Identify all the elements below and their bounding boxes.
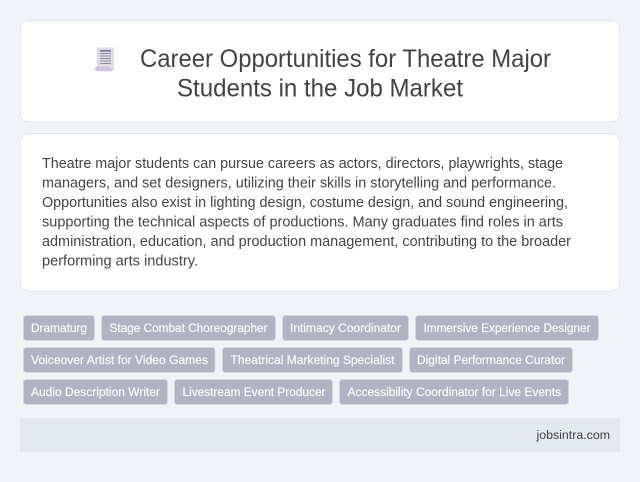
tag: Stage Combat Choreographer: Stage Combat Choreographer: [110, 321, 268, 335]
tag list: [24, 316, 598, 404]
text block: description: administration, education, and production management, contributing to the broader: [42, 234, 571, 250]
footer: [20, 418, 620, 452]
text block: description: supporting the technical aspects of productions. Many graduates find roles in arts: [42, 214, 563, 230]
tag: Digital Performance Curator: [410, 348, 572, 372]
tag: Theatrical Marketing Specialist: [222, 348, 402, 372]
tag: Intimacy Coordinator: Intimacy Coordinator: [290, 321, 401, 335]
tag: Voiceover Artist for Video Games: [24, 348, 215, 372]
icon: script document: [95, 48, 114, 71]
tag: Voiceover Artist for Video Games: Voiceover Artist for Video Games: [31, 353, 208, 367]
tag: Theatrical Marketing Specialist: Theatrical Marketing Specialist: [230, 353, 395, 367]
text block: description: managers, and set designers, utilizing their skills in storytelling and performance.: [42, 176, 556, 192]
tag: Immersive Experience Designer: Immersive Experience Designer: [424, 321, 590, 335]
text block: description: Theatre major students can pursue careers as actors, directors, playwrights, stage: [42, 156, 563, 172]
tag: Dramaturg: Dramaturg: [31, 321, 87, 335]
panel: description: [20, 134, 620, 291]
tag: Audio Description Writer: [24, 380, 168, 404]
tag: Livestream Event Producer: [174, 380, 332, 404]
text block: description: performing arts industry.: [42, 254, 198, 270]
tag: Accessibility Coordinator for Live Events: [340, 380, 568, 404]
panel: header: [20, 20, 620, 122]
text block: description: Opportunities also exist in lighting design, costume design, and sound engineering,: [42, 195, 568, 211]
footer: site name: jobsintra.com: [535, 428, 610, 442]
tag: Dramaturg: [24, 316, 94, 340]
tag: Livestream Event Producer: Livestream Event Producer: [182, 385, 326, 399]
title: Career Opportunities for Theatre Major: [140, 45, 551, 73]
text block: description: [42, 156, 571, 270]
tag: Accessibility Coordinator for Live Events: Accessibility Coordinator for Live Events: [348, 385, 561, 399]
tag: Audio Description Writer: Audio Description Writer: [31, 385, 160, 399]
tag: Digital Performance Curator: Digital Performance Curator: [417, 353, 565, 367]
tag: Immersive Experience Designer: [416, 316, 598, 340]
tag: Intimacy Coordinator: [282, 316, 408, 340]
title: Students in the Job Market: [177, 74, 463, 102]
title: [140, 45, 551, 102]
tag: Stage Combat Choreographer: [102, 316, 276, 340]
